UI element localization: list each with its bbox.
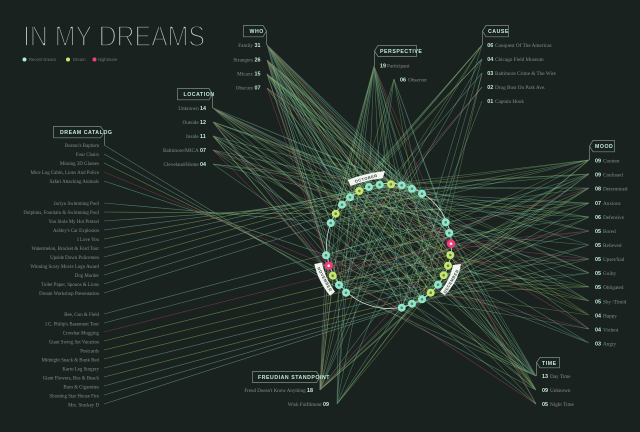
panel: dream catalog: Watermelon, Brocket & Ford Tour (32, 247, 99, 252)
panel: location: Outside (183, 120, 199, 126)
panel: who: Micaxx (237, 72, 253, 78)
panel: dream catalog (23, 126, 112, 408)
legend (22, 57, 118, 62)
panel: mood: 04 (595, 328, 601, 334)
connection lines: cause (326, 45, 482, 308)
panel: dream catalog: Toilet Paper, Spoons & Lions (41, 283, 99, 288)
panel: cause (482, 26, 557, 105)
panel: dream catalog: Bum & Cigarettes (63, 386, 99, 390)
panel: cause: 03 (487, 71, 493, 77)
panel: mood: Defensive (603, 214, 625, 221)
panel: cause: Baltimore Crime & The Wire (495, 71, 557, 77)
panel: who: Strangers (233, 58, 253, 64)
panel: mood: Angry (603, 342, 617, 348)
panel: cause: Chicago Field Museum (495, 57, 544, 63)
panel: freudian standpoint: FREUDIAN STANDPOINT (258, 375, 330, 381)
panel: freudian standpoint (244, 372, 330, 408)
panel: location: 12 (200, 120, 206, 126)
month banner: october: OCTOBER (354, 173, 378, 184)
panel: who (233, 26, 266, 92)
panel: who: Family (238, 43, 253, 49)
panel: cause: 04 (487, 57, 493, 63)
panel: dream catalog: Mrs. Stuckey D (68, 404, 99, 408)
panel: dream catalog: Karto Leg Surgery (62, 368, 100, 372)
panel: dream catalog: Crowbar Mugging (63, 332, 100, 336)
connection lines: perspective (326, 66, 451, 308)
panel: dream catalog: Winning Scary Movie Logo Award (30, 265, 100, 270)
panel: who: 31 (254, 43, 260, 49)
panel: mood: MOOD (595, 144, 613, 150)
panel: time: TIME (542, 361, 557, 367)
panel: time: 05 (542, 402, 548, 408)
panel: mood: 05 (595, 229, 601, 235)
panel: mood: Confused (603, 172, 623, 178)
panel: dream catalog: Postcards (80, 350, 99, 354)
panel: mood: 05 (595, 300, 601, 306)
panel: dream catalog: Missing 3D Glasses (60, 162, 99, 167)
panel: who: WHO (250, 29, 264, 35)
panel: mood (590, 140, 628, 348)
panel: cause: Captain Hook (495, 99, 524, 105)
panel: time: Day Time (550, 374, 571, 380)
panel: mood: Determined (603, 186, 628, 192)
panel: location: Unknown (178, 106, 199, 112)
panel: dream catalog: Four Chairs (76, 153, 99, 158)
panel: mood: Bored (603, 229, 616, 235)
panel: mood: 08 (595, 186, 601, 192)
panel: dream catalog: Ashley's Car Explosion (53, 229, 100, 234)
panel: dream catalog: J.C. Philip's Basement Tour (45, 322, 99, 328)
month banner: december: DECEMBER (442, 268, 460, 294)
month banner: november: NOVEMBER (316, 266, 333, 292)
panel: mood: 09 (595, 158, 601, 164)
panel: cause: 06 (487, 43, 493, 49)
legend: Nightmare (98, 57, 118, 62)
panel: cause: Drug Bust On Park Ave. (495, 85, 545, 91)
connection lines: time (326, 184, 536, 404)
panel: location: Baltimore/MICA (163, 148, 199, 154)
panel: time (536, 358, 574, 408)
panel: cause: Conquest Of The Americas (495, 42, 552, 49)
panel: dream catalog: Boston's Baptism (65, 144, 99, 149)
panel: location: Inside (186, 134, 199, 140)
panel: dream catalog: Safari Attacking Animals (50, 180, 99, 185)
panel: time: 09 (542, 388, 548, 394)
panel: perspective: Observer (408, 78, 427, 84)
panel: time: Night Time (550, 402, 574, 408)
panel: freudian standpoint: Wish Fulfilment (288, 401, 322, 408)
panel: dream catalog: I Love You (77, 238, 100, 243)
connection lines: who (267, 45, 451, 308)
title: IN MY DREAMS (23, 21, 205, 53)
panel: location: LOCATION (184, 92, 215, 98)
legend: Recent Dream (29, 57, 57, 62)
panel: mood: 05 (595, 285, 601, 291)
panel: perspective: 06 (400, 78, 406, 84)
panel: mood: 04 (595, 314, 601, 320)
panel: dream catalog: DREAM CATALOG (60, 130, 112, 136)
panel: mood: Content (603, 158, 620, 164)
panel: dream catalog: Bee, Gun & Field (64, 313, 100, 318)
panel: mood: 09 (595, 172, 601, 178)
panel: perspective: PERSPECTIVE (380, 49, 422, 55)
panel: perspective (374, 46, 427, 84)
panel: dream catalog: Mice Log Cabin, Lions And Police (31, 171, 99, 176)
panel: dream catalog: Dolphins, Fountain & Swimming Pool (23, 211, 100, 216)
panel: location: 11 (200, 134, 206, 140)
panel: mood: Obligated (603, 285, 624, 291)
panel: perspective: Participant (387, 64, 410, 70)
panel: mood: 05 (595, 243, 601, 249)
panel: mood: Happy (603, 314, 617, 320)
panel: cause: 01 (487, 99, 493, 105)
connection lines: location (213, 108, 451, 308)
panel: perspective: 19 (380, 64, 386, 70)
panel: dream catalog: Midnight Snack & Bunk Bed (42, 358, 100, 364)
panel: who: 15 (254, 72, 260, 78)
panel: location: 07 (200, 148, 206, 154)
panel: freudian standpoint: 18 (307, 388, 313, 394)
legend: Dream (73, 57, 86, 62)
panel: dream catalog: Jaclyn Swimming Pool (54, 202, 100, 207)
panel: dream catalog: Shooting Star House Fire (49, 394, 99, 400)
connection lines: dream catalog to ring (104, 145, 451, 404)
panel: dream catalog: Dream Workshop Presentation (39, 292, 100, 297)
connection lines: freudian standpoint (320, 184, 451, 404)
panel: location: Cleveland/Home (164, 162, 199, 168)
panel: mood: Shy /Timid (603, 300, 627, 306)
panel: mood: Anxious (603, 201, 621, 207)
panel: time: Unknown (550, 388, 571, 394)
panel: mood: 06 (595, 215, 601, 221)
panel: mood: Upset/Sad (603, 257, 625, 263)
panel: mood: Violent (603, 328, 619, 334)
panel: location (163, 88, 215, 168)
panel: dream catalog: You Stole My Hot Pretzel (48, 220, 100, 225)
panel: freudian standpoint: Freud Doesn't Know Anything (244, 389, 306, 394)
panel: who: 07 (254, 86, 260, 92)
panel: mood: Guilty (603, 271, 617, 277)
panel: who: 26 (254, 58, 260, 64)
panel: mood: 03 (595, 342, 601, 348)
date ring (326, 184, 452, 308)
month banner: november (314, 262, 335, 296)
panel: mood: 05 (595, 271, 601, 277)
panel: location: 14 (200, 106, 206, 112)
panel: mood: 05 (595, 257, 601, 263)
dream nodes (322, 180, 455, 312)
panel: freudian standpoint: 09 (323, 402, 329, 408)
panel: cause: CAUSE (488, 29, 509, 35)
panel: time: 13 (542, 374, 548, 380)
panel: who: Obscure (236, 86, 254, 92)
panel: mood: Relieved (603, 243, 622, 249)
panel: dream catalog: Giant Swing Set Vacation (49, 340, 100, 346)
panel: dream catalog: Upside Down Policemen (50, 256, 100, 261)
panel: dream catalog: Giant Flowers, Bus & Beach (43, 376, 100, 382)
month banner: october (348, 171, 385, 186)
panel: mood: 07 (595, 201, 601, 207)
panel: cause: 02 (487, 85, 493, 91)
panel: location: 04 (200, 162, 206, 168)
panel: dream catalog: Dog Murder (75, 274, 99, 279)
connection lines: mood (326, 160, 589, 343)
